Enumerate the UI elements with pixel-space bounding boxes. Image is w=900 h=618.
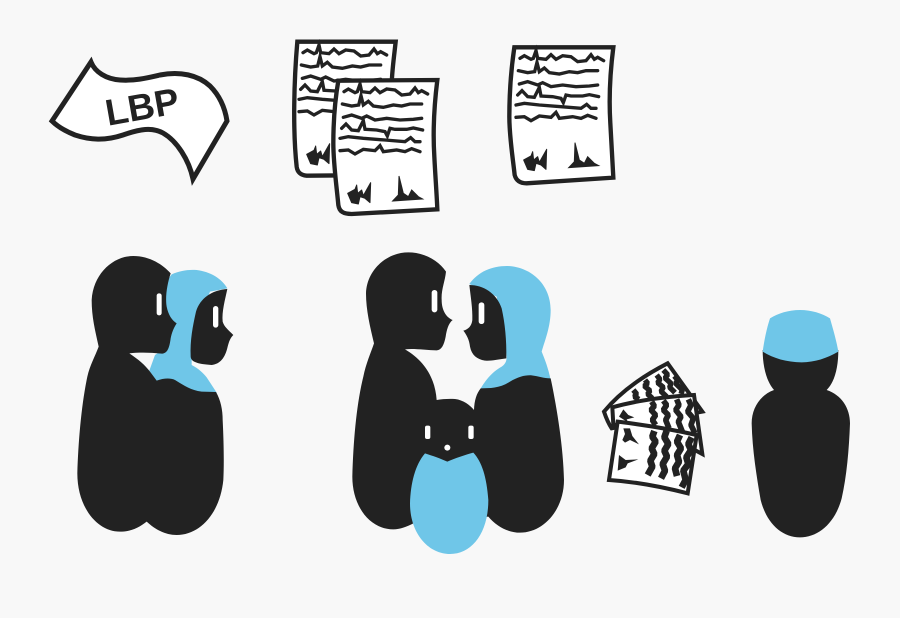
icon: two stacked documents bbox=[294, 42, 437, 214]
woman face bbox=[191, 289, 233, 365]
front document bbox=[333, 80, 437, 214]
man, woman body and child head bbox=[352, 252, 564, 533]
woman eye bbox=[479, 302, 484, 324]
child nose bbox=[444, 445, 450, 451]
child left eye bbox=[425, 426, 430, 439]
back card bbox=[604, 363, 702, 428]
icon: single document bbox=[509, 47, 613, 183]
child body bbox=[410, 453, 488, 554]
cap bbox=[763, 310, 838, 362]
figure: family with child bbox=[352, 252, 564, 554]
figure: man with blue cap bbox=[752, 310, 850, 537]
icon: fanned banknotes or cards bbox=[604, 363, 702, 493]
child right eye bbox=[468, 426, 474, 439]
body bbox=[752, 350, 850, 537]
woman hijab bbox=[149, 270, 227, 403]
man eye bbox=[157, 293, 162, 315]
back document bbox=[294, 42, 396, 176]
figure: couple bbox=[77, 256, 233, 535]
middle card bbox=[612, 395, 702, 454]
icon: LBP banknote bbox=[52, 62, 227, 179]
woman eye bbox=[213, 306, 218, 328]
label: LBP: LBP bbox=[102, 80, 182, 134]
man and woman bodies bbox=[77, 256, 224, 535]
woman face bbox=[463, 285, 506, 361]
woman hijab bbox=[469, 266, 551, 390]
front card bbox=[609, 422, 697, 493]
man eye bbox=[432, 290, 437, 312]
